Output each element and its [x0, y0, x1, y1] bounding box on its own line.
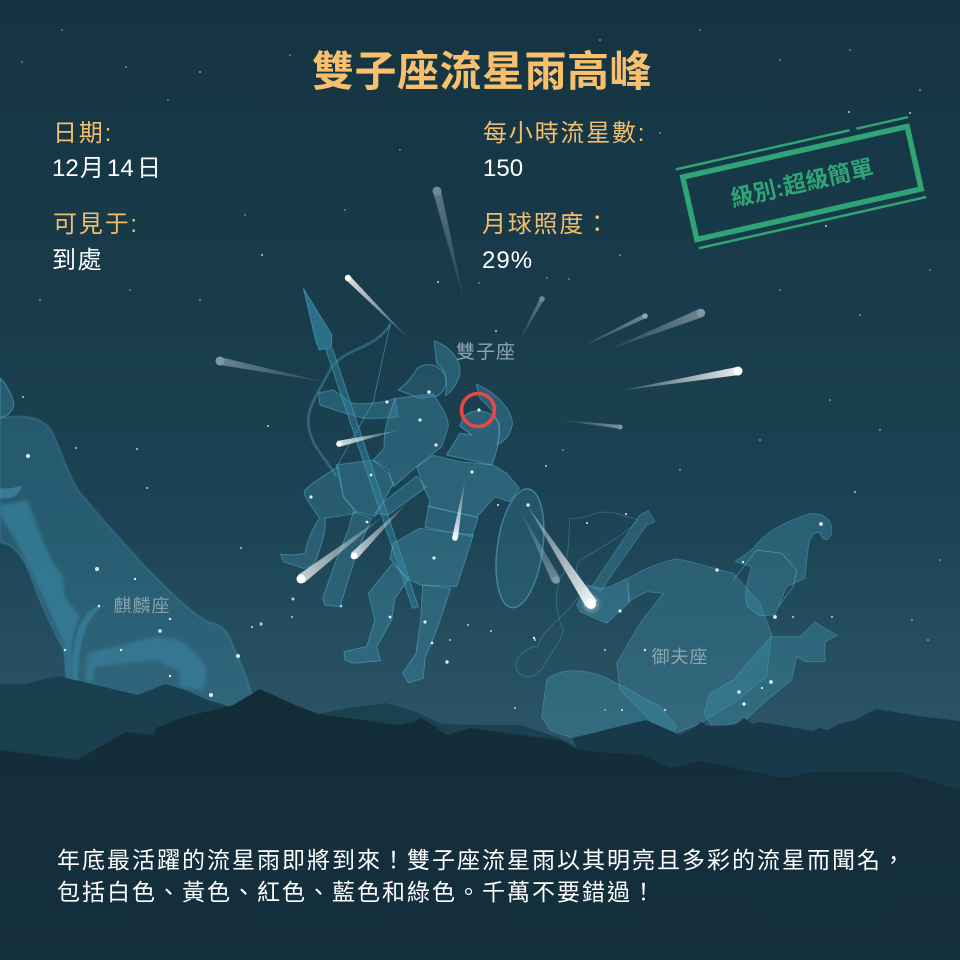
- meteor 13: [527, 505, 599, 612]
- meteor 4: [517, 296, 545, 345]
- near ridge: [0, 689, 960, 960]
- bow: [308, 323, 391, 477]
- stamp rule top: [676, 117, 908, 169]
- lower twin belt: [425, 506, 478, 537]
- info: moon illumination: [482, 211, 611, 274]
- spear shaft: [326, 349, 418, 608]
- radiant marker: red circle: [462, 394, 494, 426]
- lower twin torso: [417, 455, 519, 517]
- description line 1: 年底最活躍的流星雨即將到來！雙子座流星雨以其明亮且多彩的流星而聞名，: [57, 847, 907, 873]
- info: meteors per hour: [483, 120, 646, 182]
- Monoceros arc: [72, 605, 100, 682]
- stamp frame: [683, 127, 921, 239]
- constellation stars: [26, 390, 823, 711]
- upper twin front leg: [323, 512, 372, 607]
- stamp text: 級別:超級簡單: [728, 154, 876, 212]
- constellation: Auriga (right): [516, 511, 837, 738]
- helmet brim: [733, 550, 797, 607]
- goat outline: [516, 512, 638, 677]
- description line 2: 包括白色、黃色、紅色、藍色和綠色。千萬不要錯過！: [57, 879, 657, 905]
- far ridge left: [0, 676, 240, 800]
- lower twin rear leg: [403, 585, 451, 683]
- info: visibility: [52, 211, 139, 274]
- upper twin crest: [434, 341, 460, 396]
- spear tip: [303, 288, 332, 350]
- meteor 14: [520, 510, 560, 584]
- lower twin helmet: [447, 411, 500, 465]
- Monoceros body: [0, 416, 252, 706]
- meteor 8: [560, 420, 622, 430]
- meteor 7: [618, 366, 742, 391]
- stamp rule bottom: [699, 197, 926, 248]
- body: [617, 559, 772, 737]
- bow string: [337, 325, 390, 467]
- moon value: 29%: [482, 247, 533, 274]
- meteor 1: [345, 275, 410, 340]
- lower twin arm: [375, 476, 426, 515]
- stamp: difficulty level: [676, 117, 926, 249]
- Monoceros bright flank band: [0, 500, 80, 685]
- lower twin crest: [476, 384, 512, 445]
- meteor 6: [605, 309, 705, 351]
- arm: [704, 622, 837, 728]
- constellation: Monoceros (left): [0, 378, 252, 706]
- meteor 10: [296, 515, 385, 584]
- moon label: 月球照度：: [482, 211, 611, 238]
- meteor 5: [575, 313, 648, 350]
- far ridge centre: [318, 703, 600, 760]
- visibility label: 可見于:: [53, 211, 139, 238]
- Monoceros neck: [0, 378, 14, 418]
- constellation label: Gemini: 雙子座: [456, 341, 516, 363]
- info: date: [52, 120, 161, 182]
- date value: 日: [137, 155, 161, 182]
- meteor 12: [452, 480, 465, 541]
- upper twin rear leg: [281, 467, 357, 568]
- mountain silhouettes: [0, 676, 960, 960]
- lower twin front leg: [344, 563, 408, 663]
- scattered stars: [21, 29, 941, 741]
- meteor shower: [216, 186, 742, 612]
- constellation: Gemini twins: [281, 288, 551, 683]
- meteor 2: [216, 356, 325, 382]
- meteor 3: [432, 186, 465, 305]
- far ridge right: [572, 709, 960, 800]
- leg: [542, 671, 677, 738]
- date value: 月: [80, 155, 104, 182]
- shield: [489, 486, 551, 611]
- constellation label: Auriga: 御夫座: [652, 647, 708, 667]
- date value: 12: [52, 155, 79, 182]
- goat staff: [592, 511, 655, 592]
- hand: [577, 578, 630, 623]
- constellation label: Monoceros: 麒麟座: [114, 596, 170, 616]
- date value: 14: [107, 155, 134, 182]
- visibility value: 到處: [52, 247, 103, 274]
- rate label: 每小時流星數:: [483, 120, 646, 147]
- upper twin skirt: [336, 460, 393, 517]
- meteor 11: [351, 502, 408, 559]
- date label: 日期:: [53, 120, 113, 147]
- helmet: [735, 514, 832, 616]
- description: [57, 847, 907, 905]
- upper twin torso: [373, 394, 448, 487]
- rate value: 150: [483, 155, 523, 182]
- lower twin skirt: [390, 528, 473, 587]
- meteor 9: [336, 430, 400, 447]
- upper twin arm: [318, 390, 398, 418]
- title: 雙子座流星雨高峰: [312, 48, 652, 95]
- upper twin helmet: [398, 365, 446, 398]
- Monoceros leg band: [85, 637, 207, 690]
- Monoceros haunch: [0, 486, 22, 499]
